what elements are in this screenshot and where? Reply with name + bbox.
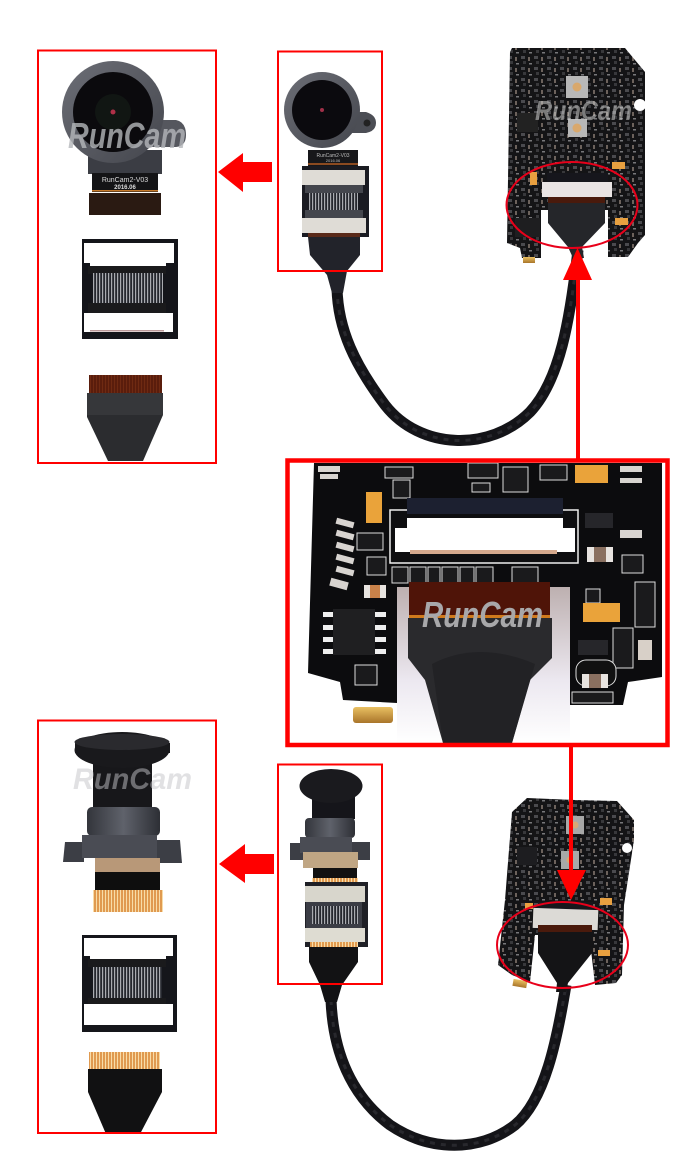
flex strip xyxy=(308,150,358,170)
panel: bottom circuit board xyxy=(498,798,634,992)
flex label strip: RunCam2-V03 xyxy=(102,177,148,184)
box: centre close-up xyxy=(288,460,668,745)
watermark: RunCam xyxy=(68,115,186,156)
barrel xyxy=(312,793,355,819)
flex xyxy=(303,852,358,887)
board xyxy=(498,798,634,985)
adapter xyxy=(305,882,368,947)
mounting hole xyxy=(634,99,646,111)
second chip xyxy=(515,218,540,237)
cable end xyxy=(548,203,605,258)
flex strip: 2016.06 xyxy=(326,158,341,163)
threaded collar xyxy=(87,807,160,836)
bracket xyxy=(82,835,157,858)
chip xyxy=(517,847,537,865)
cable end xyxy=(408,582,552,743)
watermark: RunCam xyxy=(73,763,192,796)
cable taper xyxy=(309,947,358,1002)
adapter board xyxy=(82,239,178,339)
buttons xyxy=(561,816,584,869)
panel: top-left exploded parts xyxy=(62,61,186,461)
chip xyxy=(517,113,538,132)
flex xyxy=(93,858,163,912)
tantalum capacitors xyxy=(366,465,620,622)
arrow: bottom left xyxy=(219,844,274,883)
flex end xyxy=(89,193,161,215)
highlight ellipse: top xyxy=(506,162,638,248)
antenna connector xyxy=(512,979,527,988)
orange capacitors xyxy=(530,162,628,225)
flex strip: RunCam2-V03 xyxy=(316,153,350,159)
arrow: top left xyxy=(218,153,272,192)
lens xyxy=(62,61,164,163)
ceramic capacitors xyxy=(364,547,652,688)
bracket xyxy=(300,837,352,853)
barrel xyxy=(93,762,152,808)
cable end xyxy=(87,375,163,461)
panel: top assembled module xyxy=(284,72,376,293)
watermark: RunCam xyxy=(535,95,632,126)
buttons xyxy=(566,76,588,137)
left chip xyxy=(323,609,386,655)
arrow: centre to top board xyxy=(563,248,592,459)
box: top-left xyxy=(38,50,216,463)
bottom cable xyxy=(331,985,566,1145)
board xyxy=(308,463,662,705)
highlight ellipse: bottom xyxy=(497,902,628,988)
cable end xyxy=(88,1052,162,1134)
cable taper xyxy=(308,237,360,293)
tab xyxy=(350,112,376,133)
collar xyxy=(305,818,355,838)
left coils xyxy=(318,466,642,590)
ears xyxy=(290,842,370,860)
panel: top circuit board xyxy=(507,48,646,263)
antenna connector xyxy=(523,257,535,263)
outlined solder pad groups xyxy=(355,463,655,703)
top cable xyxy=(337,250,578,440)
lens xyxy=(284,72,360,148)
lens mount tab xyxy=(150,120,186,147)
panel: centre close-up xyxy=(308,463,662,743)
box: top assembled xyxy=(278,52,382,271)
lens top xyxy=(74,732,170,768)
panel: bottom-left exploded parts xyxy=(63,732,192,1134)
adapter board xyxy=(82,935,177,1032)
right chips xyxy=(578,513,613,655)
lens top xyxy=(300,769,362,803)
arrow: centre to bottom board xyxy=(557,745,586,900)
orange capacitors xyxy=(525,898,612,956)
watermark: RunCam xyxy=(422,594,543,635)
box: bottom assembled xyxy=(278,764,382,984)
cutout shadow xyxy=(397,587,570,743)
flex label strip xyxy=(92,173,158,192)
connector xyxy=(533,902,598,933)
board xyxy=(507,48,645,258)
flex label strip: 2016.06 xyxy=(114,185,136,191)
camera module body xyxy=(88,150,162,174)
bracket ears xyxy=(63,840,182,863)
cable end xyxy=(538,932,592,992)
adapter xyxy=(302,166,369,237)
panel: bottom assembled module xyxy=(290,769,370,1002)
mounting hole xyxy=(622,843,632,853)
connector xyxy=(542,173,612,203)
antenna connector xyxy=(353,707,393,723)
connector xyxy=(390,498,578,563)
box: bottom-left xyxy=(38,720,216,1133)
